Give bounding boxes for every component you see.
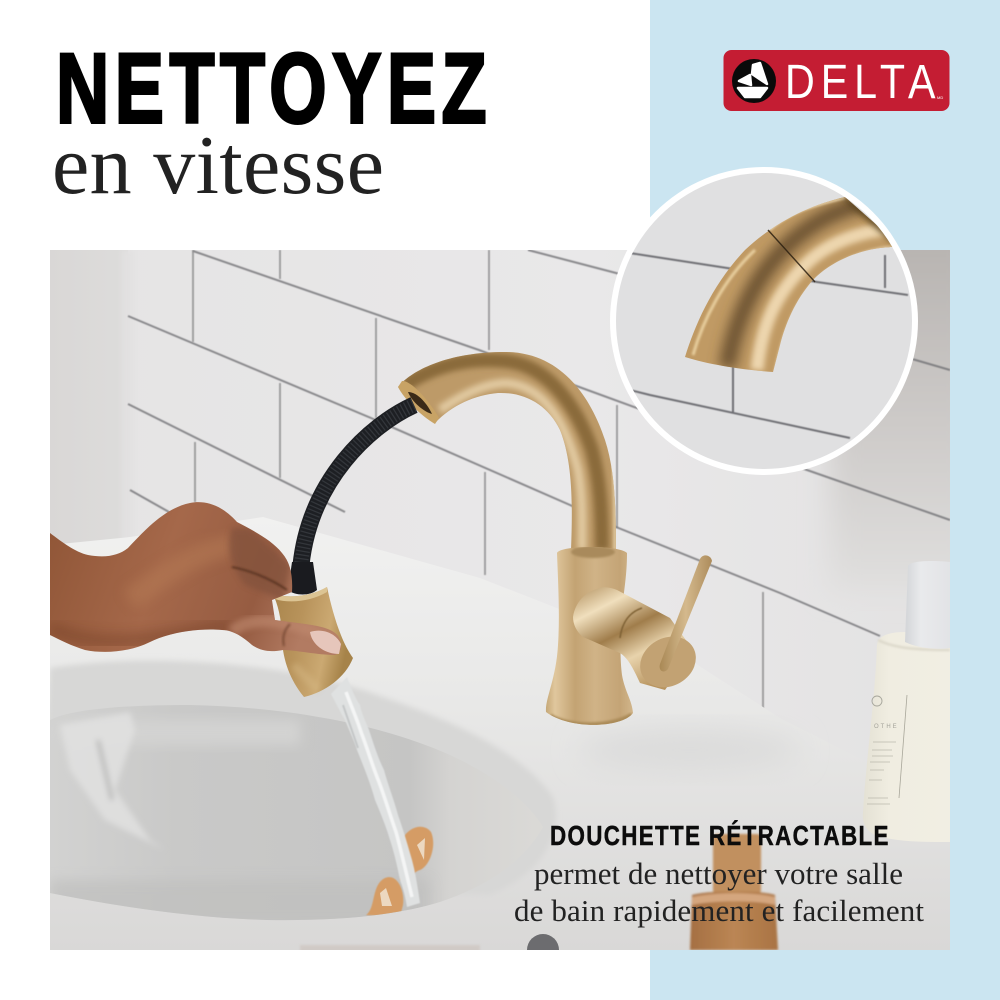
spout seam	[768, 230, 815, 282]
caption line 1: permet de nettoyer votre salle	[534, 856, 903, 891]
caption heading: DOUCHETTE RÉTRACTABLE	[550, 820, 888, 852]
bottle label	[867, 695, 907, 804]
photo: bathroom faucet scene	[50, 250, 950, 950]
bottle label: OTHE	[874, 724, 899, 730]
logo emblem	[732, 59, 776, 103]
fingernail	[310, 631, 341, 654]
handle end face	[640, 636, 696, 688]
faucet base body	[546, 547, 633, 725]
faucet	[398, 352, 712, 735]
title line: en vitesse: en vitesse	[52, 119, 384, 212]
sink rim	[50, 660, 554, 854]
logo background	[724, 50, 950, 111]
faucet spout	[398, 352, 616, 550]
inset photo	[610, 170, 920, 480]
hose	[301, 405, 414, 565]
faucet shadow on counter	[626, 737, 754, 754]
inset spout	[685, 197, 905, 372]
caption line 2: de bain rapidement et facilement	[514, 893, 924, 928]
water stream	[331, 677, 420, 907]
handle ring seam	[620, 608, 642, 638]
drain knob	[527, 934, 559, 950]
blue side panel	[650, 0, 1000, 1000]
logo: Delta	[724, 50, 950, 111]
towel edge	[300, 945, 480, 950]
caption	[514, 820, 924, 928]
countertop	[50, 517, 950, 950]
title line: NETTOYEZ: NETTOYEZ	[56, 34, 487, 144]
handle lever	[660, 555, 712, 671]
amber bottle	[690, 834, 778, 950]
bowl reflections	[62, 713, 148, 840]
orange reflection of bottle	[366, 827, 433, 917]
title	[52, 34, 487, 212]
pull-out sprayer	[273, 587, 353, 697]
hand	[50, 502, 341, 655]
lotion bottle	[863, 561, 950, 842]
registered mark: MD	[937, 95, 943, 100]
inset circle: spout close-up	[610, 167, 920, 480]
logo wordmark: DELTA	[785, 54, 935, 109]
sink bowl	[50, 705, 456, 920]
bottle cap	[905, 561, 950, 649]
hose connector	[288, 562, 317, 594]
tiled wall	[50, 250, 950, 762]
inset white ring	[610, 167, 918, 475]
faucet handle cylinder	[573, 587, 693, 690]
spout end face	[398, 381, 439, 424]
